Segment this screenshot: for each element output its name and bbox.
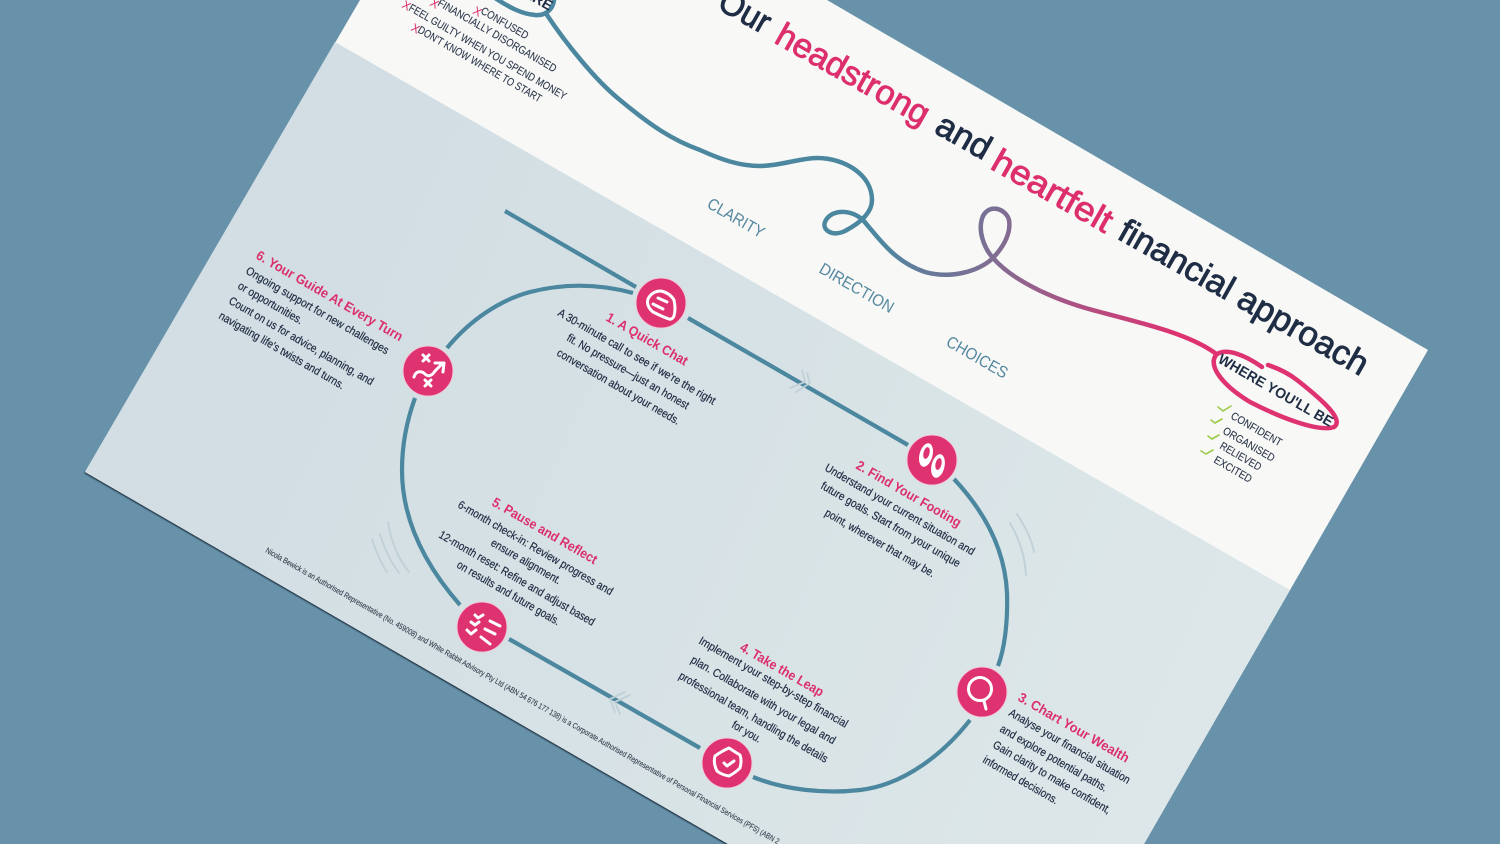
list: where you'll be: RELIEVED: [1218, 440, 1263, 474]
step 2 text: 2. Find Your Footing: [854, 458, 964, 530]
step 4 text: professional team, handling the details: [676, 670, 830, 766]
step 4 text: for you.: [730, 719, 763, 746]
step 3 text: Gain clarity to make confident,: [990, 739, 1113, 817]
step 4 text: Implement your step-by-step financial: [696, 635, 850, 731]
step 4 icon: shield check: [702, 738, 752, 788]
list: where you are: X: [408, 20, 422, 37]
step 1 icon: chat: [636, 278, 686, 328]
step 3 text: informed decisions.: [980, 754, 1060, 807]
stage labels: DIRECTION: [816, 260, 897, 317]
where you'll be heading: WHERE YOU'LL BE: [1215, 352, 1336, 431]
title: heartfelt: [985, 142, 1120, 241]
motion marks: [372, 370, 1034, 714]
step 5 text: ensure alignment.: [488, 537, 563, 587]
step 1 text: conversation about your needs.: [554, 347, 682, 428]
list: where you are: X: [470, 3, 484, 20]
step 2 text: future goals. Start from your unique: [818, 480, 962, 570]
step 6 text: 6. Your Guide At Every Turn: [254, 248, 406, 344]
step 3 icon: magnifier: [957, 667, 1007, 717]
step 6 text: navigating life's twists and turns.: [216, 310, 346, 392]
stage labels: [704, 195, 1011, 382]
list: where you'll be: [1201, 406, 1284, 486]
step 5 text: 12-month reset: Refine and adjust based: [436, 529, 597, 629]
process loop line: [402, 211, 1007, 791]
list: where you'll be: ORGANISED: [1220, 425, 1277, 465]
title: [712, 0, 1375, 383]
list: where you are: [400, 0, 569, 105]
step 5 icon: checklist: [457, 602, 507, 652]
step 6 text: [216, 248, 406, 392]
stage labels: CHOICES: [943, 333, 1011, 382]
title: and: [929, 106, 998, 168]
step 1 text: 1. A Quick Chat: [604, 310, 691, 369]
step 6 text: or opportunities.: [236, 280, 305, 327]
step 1 text: fit. No pressure—just an honest: [564, 332, 691, 412]
title: headstrong: [769, 16, 937, 133]
stage labels: CLARITY: [704, 195, 768, 242]
list: where you'll be: EXCITED: [1212, 454, 1254, 486]
list: where you'll be: CONFIDENT: [1228, 410, 1284, 449]
step 1 text: A 30-minute call to see if we're the right: [556, 307, 718, 408]
step 4 text: 4. Take the Leap: [738, 640, 826, 700]
step 2 text: point, wherever that may be.: [822, 507, 937, 580]
title: financial approach: [1112, 212, 1375, 383]
step 5 text: on results and future goals.: [454, 559, 562, 628]
step 5 text: 5. Pause and Reflect: [490, 495, 600, 567]
step 6 text: Count on us for advice, planning, and: [226, 295, 375, 388]
step 3 text: and explore potential paths.: [998, 723, 1109, 795]
journey string from where you are to where you'll be: [492, 0, 1337, 428]
step 4 text: plan. Collaborate with your legal and: [688, 654, 837, 747]
step 3 text: [980, 690, 1132, 817]
list: where you are: CONFUSED: [478, 5, 530, 42]
step 3 text: Analyse your financial situation: [1006, 707, 1132, 787]
step 2 icon: footprints: [907, 435, 957, 485]
step 5 text: 6-month check-in: Review progress and: [456, 499, 615, 598]
step 5 text: [436, 495, 615, 629]
lower panel: [85, 42, 1290, 844]
list: where you are: FEEL GUILTY WHEN YOU SPEND MONEY: [406, 2, 569, 103]
step 2 text: Understand your current situation and: [822, 462, 977, 558]
list: where you are: DON'T KNOW WHERE TO START: [416, 24, 544, 105]
step 6 text: Ongoing support for new challenges: [244, 265, 391, 357]
step 6 icon: route: [403, 346, 453, 396]
step 3 text: 3. Chart Your Wealth: [1016, 690, 1132, 766]
